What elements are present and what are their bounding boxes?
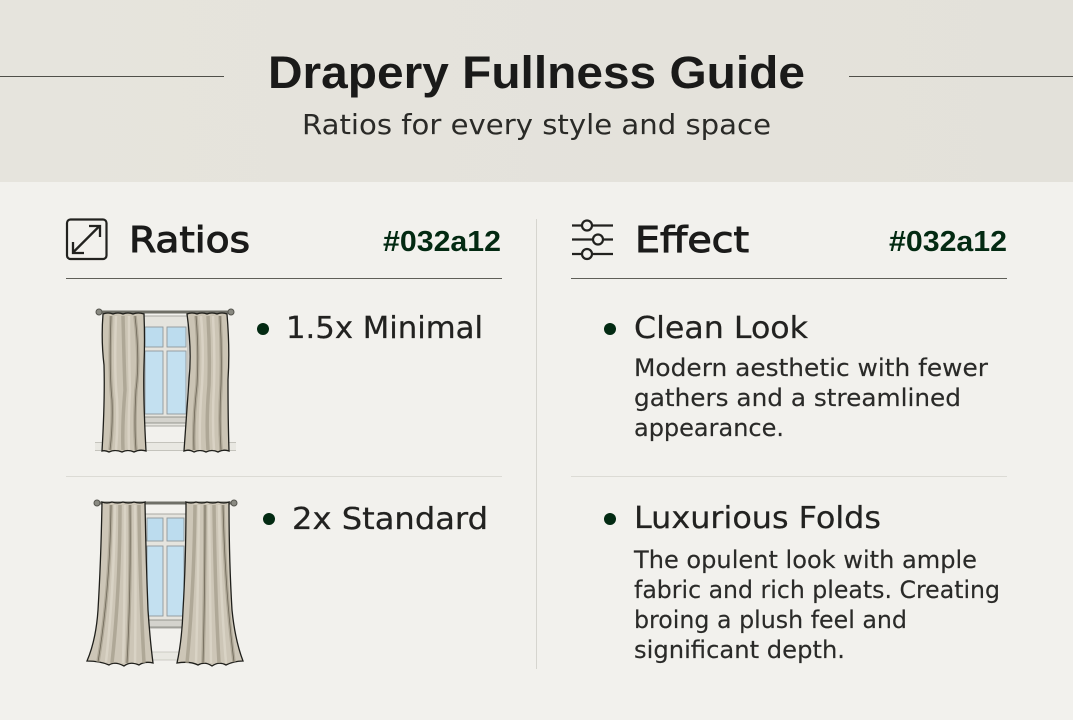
text: luxurious folds description: fabric and rich pleats. Creating: [634, 576, 1000, 604]
icon: sliders: [572, 220, 613, 259]
icon: expand arrows: [67, 220, 106, 259]
label: 1.5x minimal: 1.5x Minimal: [286, 311, 483, 346]
illustration: 2x curtains: [87, 500, 243, 666]
title: Drapery Fullness Guide: [268, 47, 805, 98]
text: clean look description: [634, 354, 988, 442]
text: clean look description: appearance.: [634, 414, 784, 442]
text: luxurious folds description: [633, 546, 1000, 664]
panel: ratios: [66, 220, 502, 666]
illustration: 1.5x curtains: [95, 309, 236, 452]
hex code: #032a12: [889, 226, 1007, 258]
text: clean look description: Modern aesthetic with fewer: [634, 354, 988, 382]
bullet: luxurious folds: [604, 513, 616, 525]
text: luxurious folds description: broing a plush feel and: [634, 606, 907, 634]
bullet: 1.5x: [257, 323, 269, 335]
text: clean look description: gathers and a streamlined: [634, 384, 961, 412]
label: clean look: Clean Look: [634, 311, 809, 346]
text: luxurious folds description: The opulent look with ample: [633, 546, 977, 574]
subtitle: Ratios for every style and space: [302, 108, 771, 141]
header band: [0, 0, 1073, 182]
label: 2x standard: 2x Standard: [292, 502, 488, 537]
text: luxurious folds description: significant depth.: [634, 636, 845, 664]
center divider: [536, 219, 538, 669]
heading: effect: Effect: [635, 220, 749, 261]
hex code: #032a12: [383, 226, 501, 258]
panel: effect: [571, 220, 1007, 664]
bullet: clean look: [604, 323, 616, 335]
label: luxurious folds: Luxurious Folds: [634, 501, 881, 536]
heading: ratios: Ratios: [129, 220, 250, 261]
bullet: 2x: [263, 513, 275, 525]
